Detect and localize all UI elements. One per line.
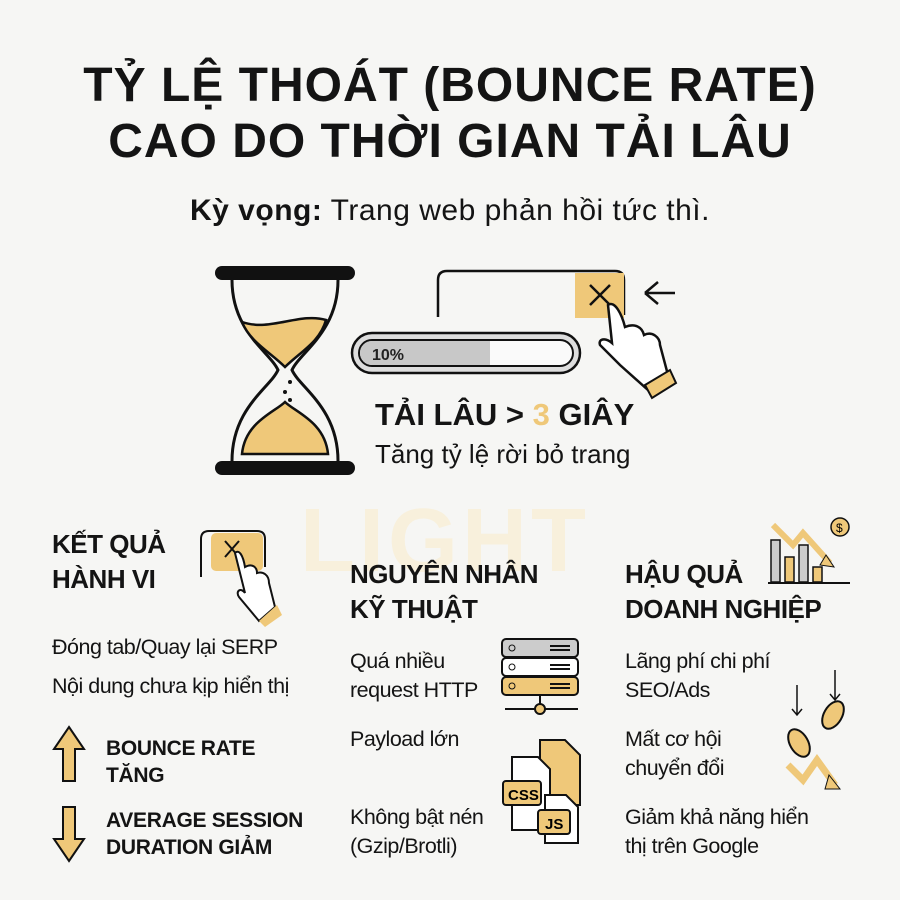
panel: behavior results: Đóng tab/Quay lại SERP (52, 635, 278, 659)
icon: css js files (502, 739, 581, 844)
title (83, 58, 817, 168)
panel: business consequences: Lãng phí chi phí (625, 649, 770, 673)
panel: business consequences (625, 517, 850, 858)
panel: behavior results: BOUNCE RATE (106, 737, 255, 760)
heading: business: DOANH NGHIỆP (625, 594, 821, 624)
panel: business consequences: Mất cơ hội (625, 727, 721, 751)
icon: hand click (200, 530, 282, 627)
progress bar (350, 332, 582, 374)
icon: falling chart (768, 517, 850, 584)
panel: technical causes: Payload lớn (350, 727, 459, 751)
heading: technical (350, 559, 538, 624)
heading: business (625, 559, 821, 624)
title: CAO DO THỜI GIAN TẢI LÂU (108, 115, 792, 168)
icon: hourglass (215, 266, 355, 475)
icon: css js files: CSS (508, 787, 539, 804)
icon: arrow down (52, 806, 86, 863)
callout: load time (375, 397, 634, 469)
icon: arrow up (52, 725, 86, 782)
panel: technical causes: request HTTP (350, 678, 478, 702)
callout: load time: TẢI LÂU > 3 GIÂY (375, 397, 634, 432)
icon: coins (786, 670, 845, 790)
heading: behavior: HÀNH VI (52, 564, 155, 594)
panel: business consequences: thị trên Google (625, 834, 759, 858)
panel: technical causes: (Gzip/Brotli) (350, 834, 457, 858)
panel: behavior results: AVERAGE SESSION (106, 809, 303, 832)
panel: behavior results: TĂNG (106, 764, 164, 787)
title: TỶ LỆ THOÁT (BOUNCE RATE) (83, 59, 817, 112)
panel: business consequences: chuyển đổi (625, 756, 724, 780)
watermark: LIGHT (300, 491, 590, 591)
panel: technical causes: Không bật nén (350, 805, 483, 829)
panel: business consequences: SEO/Ads (625, 678, 710, 702)
icon: falling chart: $ (836, 521, 843, 535)
panel: business consequences: Giảm khả năng hiển (625, 805, 808, 829)
panel: behavior results: Nội dung chưa kịp hiển thị (52, 674, 289, 698)
panel: technical causes: Quá nhiều (350, 649, 445, 673)
heading: business: HẬU QUẢ (625, 559, 743, 589)
panel: behavior results (52, 529, 303, 863)
heading: behavior (52, 529, 166, 594)
icon: browser window with close and hand (436, 270, 678, 400)
heading: behavior: KẾT QUẢ (52, 529, 166, 559)
icon: css js files: JS (545, 816, 563, 833)
panel: behavior results: DURATION GIẢM (106, 836, 272, 859)
progress bar: 10% (372, 347, 404, 364)
callout: load time: Tăng tỷ lệ rời bỏ trang (375, 439, 631, 469)
icon: server (501, 638, 579, 715)
subtitle: Kỳ vọng: Trang web phản hồi tức thì. (190, 194, 710, 227)
panel: technical causes (350, 559, 581, 858)
heading: technical: NGUYÊN NHÂN (350, 559, 538, 589)
heading: technical: KỸ THUẬT (350, 594, 477, 624)
